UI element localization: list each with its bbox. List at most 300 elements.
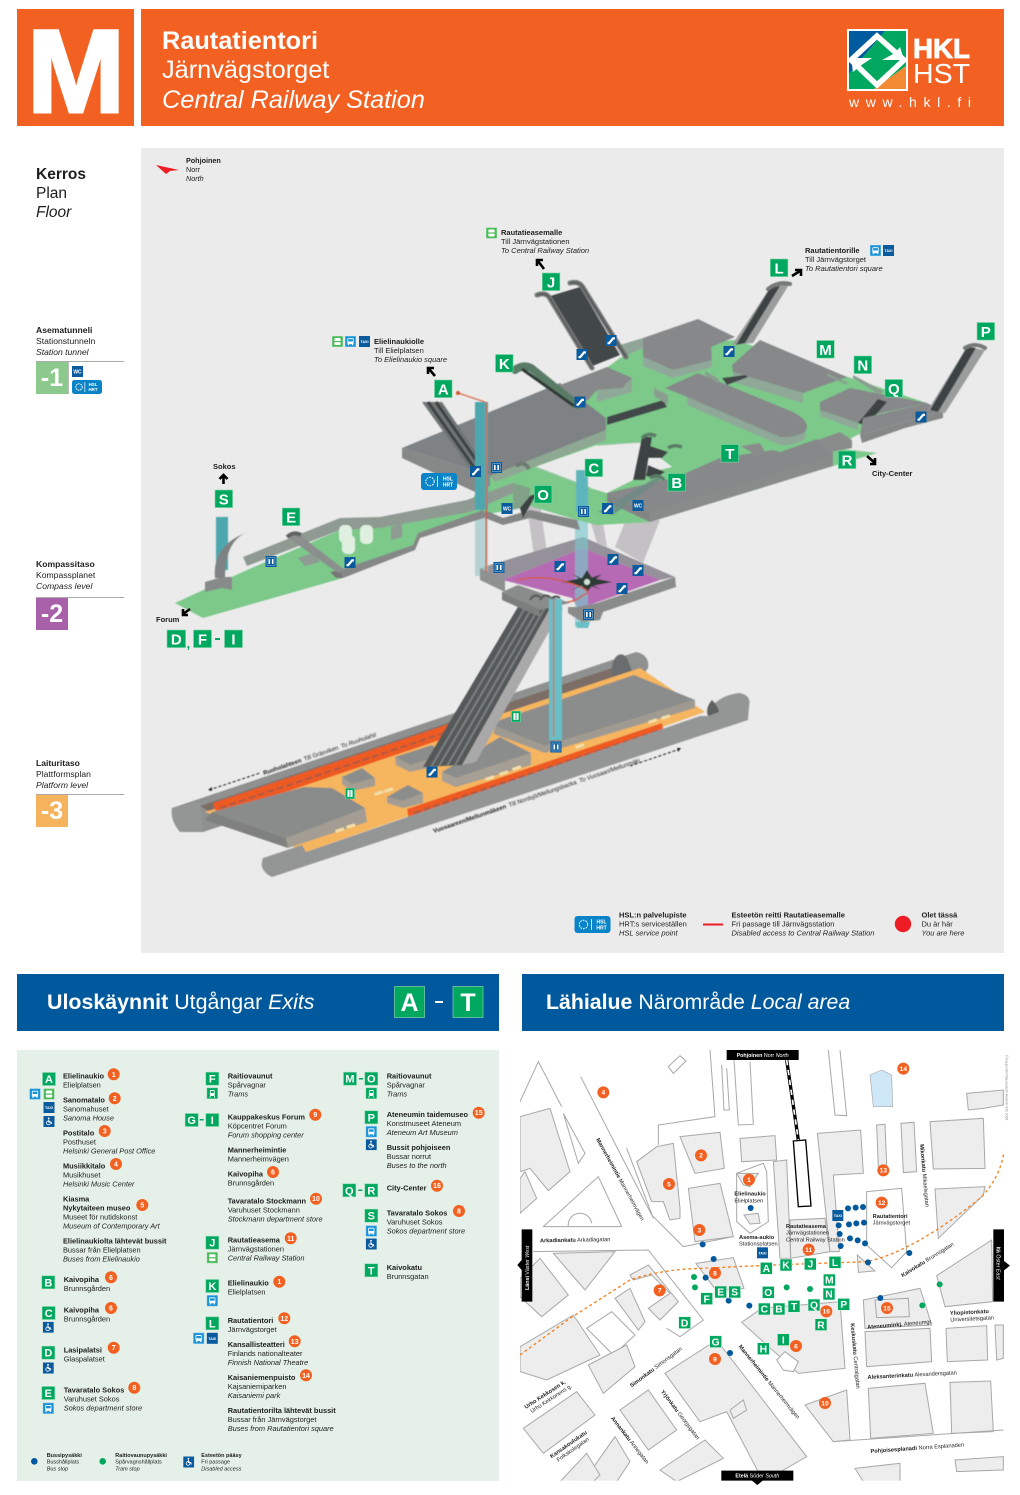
map numbered places: 10 [821,1400,829,1407]
text: destinations A: Elielplatsen [63,1080,101,1089]
label: to Elielinaukio: To Elielinaukio square [374,355,447,364]
escalator A [422,402,490,473]
map street labels: Ateneuminkj. Ateneumgr. [867,1319,933,1331]
exit S: Tavaratalo Sokos [387,1209,447,1218]
badges D, F - I: , [186,636,190,651]
tunnel back wall [172,652,648,832]
badge L: L [775,260,784,277]
level -1 legend: Station tunnel [36,347,90,357]
text: destinations A: Elielinaukio [63,1071,105,1080]
exit L: L [209,1318,216,1330]
map numbered places: 2 [699,1153,703,1160]
icons: platform [426,742,562,778]
map numbered places: 9 [713,1356,717,1363]
exit C: 6 [109,1306,113,1312]
numbers A: 1 [112,1072,116,1079]
exit K: K [208,1281,216,1293]
exit D: Glaspalatset [64,1354,105,1363]
map street labels: Central Railway Station [786,1237,845,1243]
exit P: P [368,1112,375,1124]
text: destinations P: Ateneum Art Museum [386,1128,458,1137]
exit Q-R: 16 [433,1183,441,1190]
exit S: Sokos department store [387,1227,465,1236]
badge R: R [842,452,853,469]
text: accessible route: Esteetön reitti Rautatieasemalle [732,910,845,920]
badge N [854,356,872,374]
map street labels: Yliopistonkatu [950,1309,990,1317]
badge O [534,486,552,504]
level -3 legend [36,758,124,827]
text: destinations G-I: Kaivopiha [228,1170,264,1179]
map exit letters: C [761,1305,769,1316]
map street labels [524,1055,1009,1465]
exit M-O: Trams [387,1089,407,1098]
platform block east [494,675,695,753]
west strip floor [175,465,597,618]
text: destinations G-I: Kauppakeskus Forum [228,1113,305,1122]
label: City-Center: City-Center [872,469,913,478]
platform yellow strips [335,714,670,833]
exit D: Lasipalatsi [64,1345,102,1354]
text: destinations A: Posthuset [63,1137,96,1146]
text: destinations A: Bussar från Elielplatsen [63,1245,141,1254]
icon: lift green [345,788,355,799]
text: HSL service point: HSL service point [619,928,679,938]
level -3 legend: -3 [41,797,63,825]
map numbered places: 8 [713,1270,717,1277]
map street labels: Universitetsgatan [950,1315,994,1324]
shaft A [456,391,488,572]
exit P [365,1107,485,1170]
map street labels: Stationsplatsen [739,1242,778,1248]
icons: west strip [266,556,356,568]
text: destinations L: Finlands nationalteater [228,1349,303,1358]
icon: WC: WC [73,370,82,376]
badge E [282,508,300,526]
exit F: Raitiovaunut [228,1071,273,1080]
E escalator [287,524,402,573]
icon: elevator C [578,506,589,517]
exit L [193,1312,336,1433]
text: destinations P: Bussar norrut [387,1152,431,1161]
badge C [585,459,603,477]
exit badges [167,259,995,651]
map numbered places: 6 [794,1343,798,1350]
line: accessible route [703,924,723,926]
text: you are here: Olet tässä [922,910,958,920]
map exit letters: G [712,1337,720,1348]
text: destinations L: Kajsaniemiparken [228,1382,286,1391]
compass flag: south [721,1471,793,1485]
south train [407,723,664,822]
compass star [562,570,612,592]
map street labels: Simonkatu Simonsgatan [629,1346,684,1389]
exit J: Rautatieasema [228,1236,281,1245]
icon: HSL service point: HRT [443,482,453,488]
map street labels: Järnvägstationen [786,1231,829,1237]
text: destinations L: Kansallisteatteri [228,1340,285,1349]
water cylinders [339,525,373,554]
label: to Elielinaukio: Elielinaukiolle [374,337,424,346]
badge R [838,451,856,469]
badge A: A [438,381,449,398]
exit Q-R: R [367,1185,375,1197]
map exit letters: A [763,1264,771,1275]
title: station name in three languages: Central Railway Station [162,86,425,114]
text: destinations G-I: Mannerheimintie [228,1146,286,1155]
text: destinations A: Musiikkitalo [63,1161,106,1170]
void under concourse [535,442,672,493]
level back walls [480,537,675,580]
numbers L: 13 [291,1339,299,1346]
disabled access: Esteetön pääsy [201,1453,243,1459]
level -2 legend [36,559,124,630]
label: to Rautatientori: TAXI [885,249,892,253]
level -2 legend: Kompassplanet [36,570,96,580]
icon: escalator O [602,503,613,514]
legend: stops [31,1453,243,1472]
text: destinations A: Sanomatalo [63,1095,105,1104]
map exit letters: P [840,1300,847,1311]
badge B: B [671,475,682,492]
accessible route [517,578,588,603]
map exit letters: N [825,1290,833,1301]
map taxi stands: TAXI [758,1251,767,1255]
label: to railway station [486,228,589,255]
text: destinations A: Museum of Contemporary Art [63,1221,161,1230]
map numbered places: 7 [658,1288,662,1295]
block north [643,319,735,370]
text: destinations P: Buses to the north [387,1161,447,1170]
icon: HSL service point: HSL [443,476,453,482]
label: Forum: Forum [156,615,180,624]
compass flag: north: Pohjoinen Norr North [737,1053,789,1059]
escalator O top [516,464,529,469]
icon: HSL service point [72,380,102,394]
text: destinations L: Kaisaniemenpuisto [228,1373,296,1382]
numbers G-I: 10 [312,1196,320,1203]
exit C: Kaivopiha [64,1306,100,1315]
map numbered places: 16 [823,1309,830,1316]
map street labels: Yrjönkatu Georgsgatan [659,1389,700,1441]
map exit letters: T [791,1302,798,1313]
icon: elevator [491,462,502,473]
map exit letters: D [681,1318,689,1329]
badges D, F - I [167,630,242,651]
numbers A: 2 [113,1096,117,1103]
badge P: P [981,324,991,341]
level -1 legend [36,325,124,394]
compass flag: east: Itä Öster East [995,1247,1002,1280]
text: destinations L: Järnvägstorget [228,1325,277,1334]
exit M-O: O [367,1074,376,1086]
exit M-O [344,1071,432,1099]
badge K [496,354,513,373]
text: you are here: You are here [922,928,964,938]
exit T: T [368,1265,375,1277]
map numbered places: 4 [601,1090,605,1097]
map exit letters: K [782,1261,790,1272]
T and R blocks [741,443,765,456]
map street labels: Arkadiankatu Arkadiagatan [540,1237,610,1244]
dot: you are here [895,916,911,932]
icon: HSL [574,916,610,933]
map street labels: Kansakoulukatu [549,1430,589,1460]
exit B: B [44,1277,52,1289]
railway platform and track [787,1060,811,1207]
escalator J [537,282,626,368]
exit E: Sokos department store [64,1404,142,1413]
exit Q-R [343,1180,443,1197]
badge O: O [537,487,549,504]
concourse level -1 [175,282,985,618]
badge S [215,490,233,508]
heading: floor: Floor [36,204,72,221]
text: HSL service point: HRT:s serviceställen [619,920,687,928]
platform block west [205,787,367,848]
level -3 legend: Laituritaso [36,758,80,768]
badge B [668,474,686,492]
arrows: exit directions [183,260,875,615]
map street labels: Annankatu Annegatan [609,1416,649,1465]
icons: upper escalators [574,335,926,422]
badge Q: Q [888,381,900,398]
badge: T [453,986,483,1018]
purple floor [503,548,660,608]
heading: floor: Plan [36,185,67,202]
escalator L [732,283,790,345]
tram stop [99,1453,167,1472]
exit G-I: I [211,1115,214,1127]
map street labels: © Kaupunkimittausosasto Helsinki 002 2006 [1005,1055,1009,1120]
icon: escalator [470,466,481,477]
map street labels: Folkskolegatan [556,1437,591,1464]
arrow: Ruoholahti direction [208,732,378,791]
map numbered places: 12 [878,1200,886,1207]
map exit letters: M [825,1276,834,1287]
block M [732,340,847,393]
platform level -3 [172,652,750,877]
map street labels: Keskuskatu Centralgatan [849,1323,860,1389]
escalator P [928,345,985,413]
bus stop [31,1453,82,1472]
label: Sokos: Sokos [213,462,236,471]
map street labels: Mikonkatu Mikaelsgatan [918,1144,929,1207]
exit E: Tavaratalo Sokos [64,1386,124,1395]
exit D: 7 [112,1345,116,1352]
map numbered places: 1 [747,1177,751,1184]
compass flag: west: Länsi Väster West [525,1245,531,1290]
badge A [434,380,452,398]
text: accessible route: Fri passage till Järnvägsstation [732,920,834,928]
map numbered places: 11 [805,1247,812,1254]
service icons in cutaway [266,335,926,799]
badge E: E [286,509,296,526]
badge Q [885,380,903,398]
bus stop: Busshållplats [47,1459,79,1466]
block Q [820,388,927,423]
heading bar: local area [522,974,1004,1031]
map taxi stands: TAXI [834,1214,842,1218]
exit K: Elielplatsen [228,1288,266,1297]
label: to Elielinaukio [332,336,447,364]
text: destinations P: Ateneumin taidemuseo [387,1110,468,1119]
exit G-I: G [187,1115,196,1127]
exit C: Brunnsgården [64,1315,110,1324]
legend: services [574,910,964,938]
icon: WC east: WC [634,504,643,510]
map street labels: Elielinaukio [734,1192,766,1198]
map street labels: Urho Kekkonens g. [530,1383,574,1415]
icons L: TAXI [208,1337,216,1341]
translucent support legs [527,503,660,563]
shaft C [576,470,588,512]
badge J [542,273,560,291]
central island [665,373,807,437]
badges D, F - I: I [231,631,236,648]
escalators B [598,434,682,515]
numbers L: 12 [280,1316,288,1323]
badge: A [394,986,424,1018]
numbers L: 14 [302,1373,310,1380]
east wall [860,403,943,435]
map exit letters: B [775,1305,783,1316]
exit T: Kaivokatu [387,1263,423,1272]
compass flag: south: Etelä Söder South [735,1474,779,1480]
exit D: D [44,1348,52,1360]
text: destinations G-I: Forum shopping center [228,1131,304,1140]
icon: HSL service point [421,473,457,490]
map exit letters: Q [810,1301,818,1312]
map street labels: Elielplatsen [734,1198,763,1204]
exit E: 8 [132,1385,136,1392]
text: destinations A: Museet för nutidskonst [63,1212,137,1221]
icon: HSL: HRT [596,926,607,932]
map street labels: Mannerheimintie Mannerheimvägen [594,1137,645,1222]
exit Q-R: Q [345,1185,354,1197]
text: destinations L: Kaisaniemi park [228,1391,281,1400]
level -2 legend: -2 [41,600,63,628]
label: north: North [186,174,204,183]
exit A: A [45,1074,53,1086]
title: station name in three languages: Rautatientori [162,27,318,55]
level -2 legend: Compass level [36,581,93,591]
title: station name in three languages: Järnvägstorget [162,56,329,84]
text: destinations G-I: Mannerheimvägen [228,1155,289,1164]
west grey block [402,383,606,476]
text: accessible route: Disabled access to Central Railway Station [732,928,874,938]
label: to railway station: Rautatieasemalle [501,228,562,237]
exit C: C [45,1308,53,1320]
exit B: Kaivopiha [64,1275,100,1284]
text: destinations A: Sanomahuset [63,1104,109,1113]
exit K: Elielinaukio [228,1279,269,1288]
badge C: C [588,460,599,477]
map exit letters: H [760,1344,767,1355]
exit B: 6 [109,1275,113,1282]
shaft A descending [475,510,488,576]
exit S: 8 [457,1208,461,1216]
map numbered places: 13 [880,1168,887,1175]
map exit letters: L [832,1258,838,1269]
exit F: F [209,1074,216,1086]
map bus stops [700,1204,912,1356]
map street labels: Pohjoisesplanadi Norra Esplanaden [870,1442,964,1455]
numbers A: 3 [103,1128,107,1136]
icon: HSL service point: HSL [89,382,98,387]
exit D [42,1342,120,1374]
level -1 legend: -1 [41,364,63,392]
exit B: Brunnsgården [64,1284,110,1293]
exit A [30,1068,167,1263]
label: to Rautatientori [805,245,894,273]
exit S [365,1205,465,1250]
exit K: 1 [277,1279,281,1286]
label: north [156,156,221,183]
heading bar: exits: Uloskäynnit Utgångar Exits [47,990,315,1014]
shaft C descending [575,500,588,627]
label: to Ruoholahti: RuoholahteenTill GräsvikenTo Ruoholahti [263,732,378,777]
badge T [721,444,739,463]
map exit letters: F [704,1294,710,1305]
label: to Rautatientori: To Rautatientori square [805,264,883,273]
map exit letters: J [807,1260,813,1271]
exit E [42,1382,142,1414]
map exit letters: E [717,1288,724,1299]
map street labels: Urho Kekkosen k. [524,1379,568,1411]
heading: floor: Kerros [36,166,86,183]
map street labels: Aleksanterinkatu Alexandersgatan [867,1370,957,1381]
badge: A: A [400,989,419,1017]
exit F: Spårvagnar [228,1080,266,1089]
text: destinations L: Finnish National Theatre [228,1358,308,1367]
header: station name banner [141,9,1004,126]
bus stop: Bussipysäkki [47,1453,82,1459]
level -2 legend: Kompassitaso [36,559,95,569]
level -1 legend: Stationstunneln [36,336,95,346]
label: to Rautatientori: Rautatientorille [805,246,860,255]
small blocks [342,745,445,808]
disabled access: Fri passage [201,1460,230,1466]
text: destinations A: Kiasma [63,1194,90,1203]
tram and metro route dotted [520,1152,1004,1355]
map numbered places: 3 [697,1227,701,1234]
block K [555,367,632,405]
icon: lift green east [511,711,521,722]
label: to Vuosaari and Mellunmäki: Vuosaareen/MellunmäkeenTill Nordsjö/MellungsbackaTo Vuosaari/Mellunmäki [433,758,641,835]
map numbered places: 15 [883,1305,891,1312]
exit K [206,1276,285,1306]
heading bar: local area: Lähialue Närområde Local area [546,990,850,1014]
text: destinations A: Nykytaiteen museo [63,1203,131,1212]
stair block middle [442,737,531,787]
exit S: Varuhuset Sokos [387,1218,443,1227]
exit F: Trams [228,1089,248,1098]
badges D, F - I: D [171,631,182,648]
level -3 legend: Plattformsplan [36,769,91,779]
exit G-I [185,1109,323,1224]
east concourse floor [468,340,927,525]
map street labels: Rautatieasema [786,1224,827,1230]
tunnel front wall [262,693,750,877]
map exit letters [681,1258,847,1355]
north train [213,722,458,815]
icon: WC west: WC [503,506,512,512]
label: to Elielinaukio: TAXI [361,340,368,344]
compass level -2 [475,500,676,628]
exit E: E [45,1388,52,1400]
badge T: T [725,446,734,463]
